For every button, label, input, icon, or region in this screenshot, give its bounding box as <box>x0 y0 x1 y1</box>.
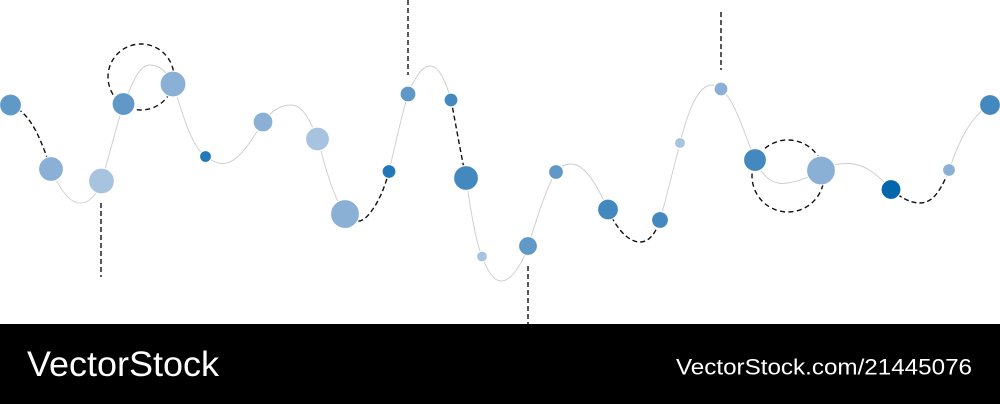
wavy grey connecting line <box>51 65 990 281</box>
blue nodes <box>0 71 1000 262</box>
dashed vertical leader lines <box>101 0 721 324</box>
footer band <box>0 324 1000 404</box>
footer logo text: VectorStock <box>27 344 219 384</box>
footer image id text: VectorStock.com/21445076 <box>676 354 972 380</box>
dashed circles <box>108 44 824 212</box>
dashed curve segments <box>10 100 949 242</box>
